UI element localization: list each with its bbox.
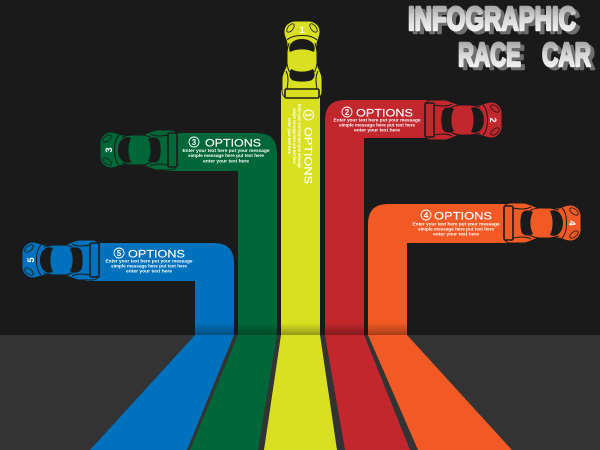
label: option 2: simple message here put text here bbox=[339, 122, 416, 128]
label: option 1: OPTIONS bbox=[302, 127, 314, 184]
title bbox=[408, 0, 595, 76]
red track bbox=[325, 100, 435, 450]
green track bbox=[165, 133, 277, 450]
label: option 3 bbox=[182, 137, 270, 164]
label: option 5: enter your text here bbox=[126, 268, 173, 274]
label: option 5: 5 bbox=[117, 249, 122, 258]
car 2 red: 2 bbox=[487, 117, 498, 123]
label: option 2: OPTIONS bbox=[356, 108, 413, 120]
label: option 1: enter your text here bbox=[287, 118, 292, 154]
label: option 4: 4 bbox=[424, 211, 429, 220]
label: option 3: 3 bbox=[192, 138, 197, 147]
floor bbox=[0, 335, 600, 450]
car 4 orange: 4 bbox=[566, 220, 577, 226]
label: option 3: enter your text here bbox=[203, 158, 250, 164]
label: option 5 bbox=[106, 248, 193, 274]
label: option 3: Enter your text here put your message bbox=[182, 148, 270, 153]
label: option 1: simple message here put text here bbox=[292, 108, 297, 164]
label: option 3: OPTIONS bbox=[205, 138, 261, 150]
label: option 1: 1 bbox=[304, 113, 312, 118]
label: option 2: 2 bbox=[345, 108, 350, 117]
car 3 green: 3 bbox=[104, 147, 115, 153]
label: option 2: enter your text here bbox=[354, 128, 401, 132]
car 5 blue bbox=[22, 240, 99, 280]
car 1 yellow bbox=[282, 21, 322, 98]
yellow track bbox=[264, 90, 337, 450]
label: option 4: OPTIONS bbox=[434, 210, 492, 222]
label: option 1 bbox=[287, 104, 314, 184]
label: option 1: Enter your text here put your message bbox=[297, 104, 302, 168]
title: RACE bbox=[458, 36, 521, 73]
orange track bbox=[368, 204, 515, 450]
label: option 4 bbox=[412, 210, 500, 236]
blue track bbox=[85, 243, 234, 450]
label: option 5: Enter your text here put your message bbox=[106, 258, 193, 264]
title: RACE bbox=[462, 39, 525, 76]
car 1 yellow: 1 bbox=[299, 25, 305, 36]
label: option 2: Enter your text here put your message bbox=[334, 118, 421, 122]
label: option 4: simple message here put text here bbox=[418, 226, 495, 232]
label: option 2 bbox=[334, 107, 421, 132]
car 3 green bbox=[100, 130, 177, 170]
background wall bbox=[0, 0, 600, 335]
label: option 5: simple message here put text here bbox=[111, 264, 188, 268]
car 4 orange bbox=[504, 203, 581, 243]
label: option 5: OPTIONS bbox=[128, 248, 185, 260]
label: option 3: simple message here put text here bbox=[188, 153, 265, 158]
label: option 4: Enter your text here put your message bbox=[412, 222, 500, 226]
car 2 red bbox=[425, 100, 502, 140]
label: option 4: enter your text here bbox=[433, 232, 480, 236]
car 5 blue: 5 bbox=[26, 257, 37, 263]
